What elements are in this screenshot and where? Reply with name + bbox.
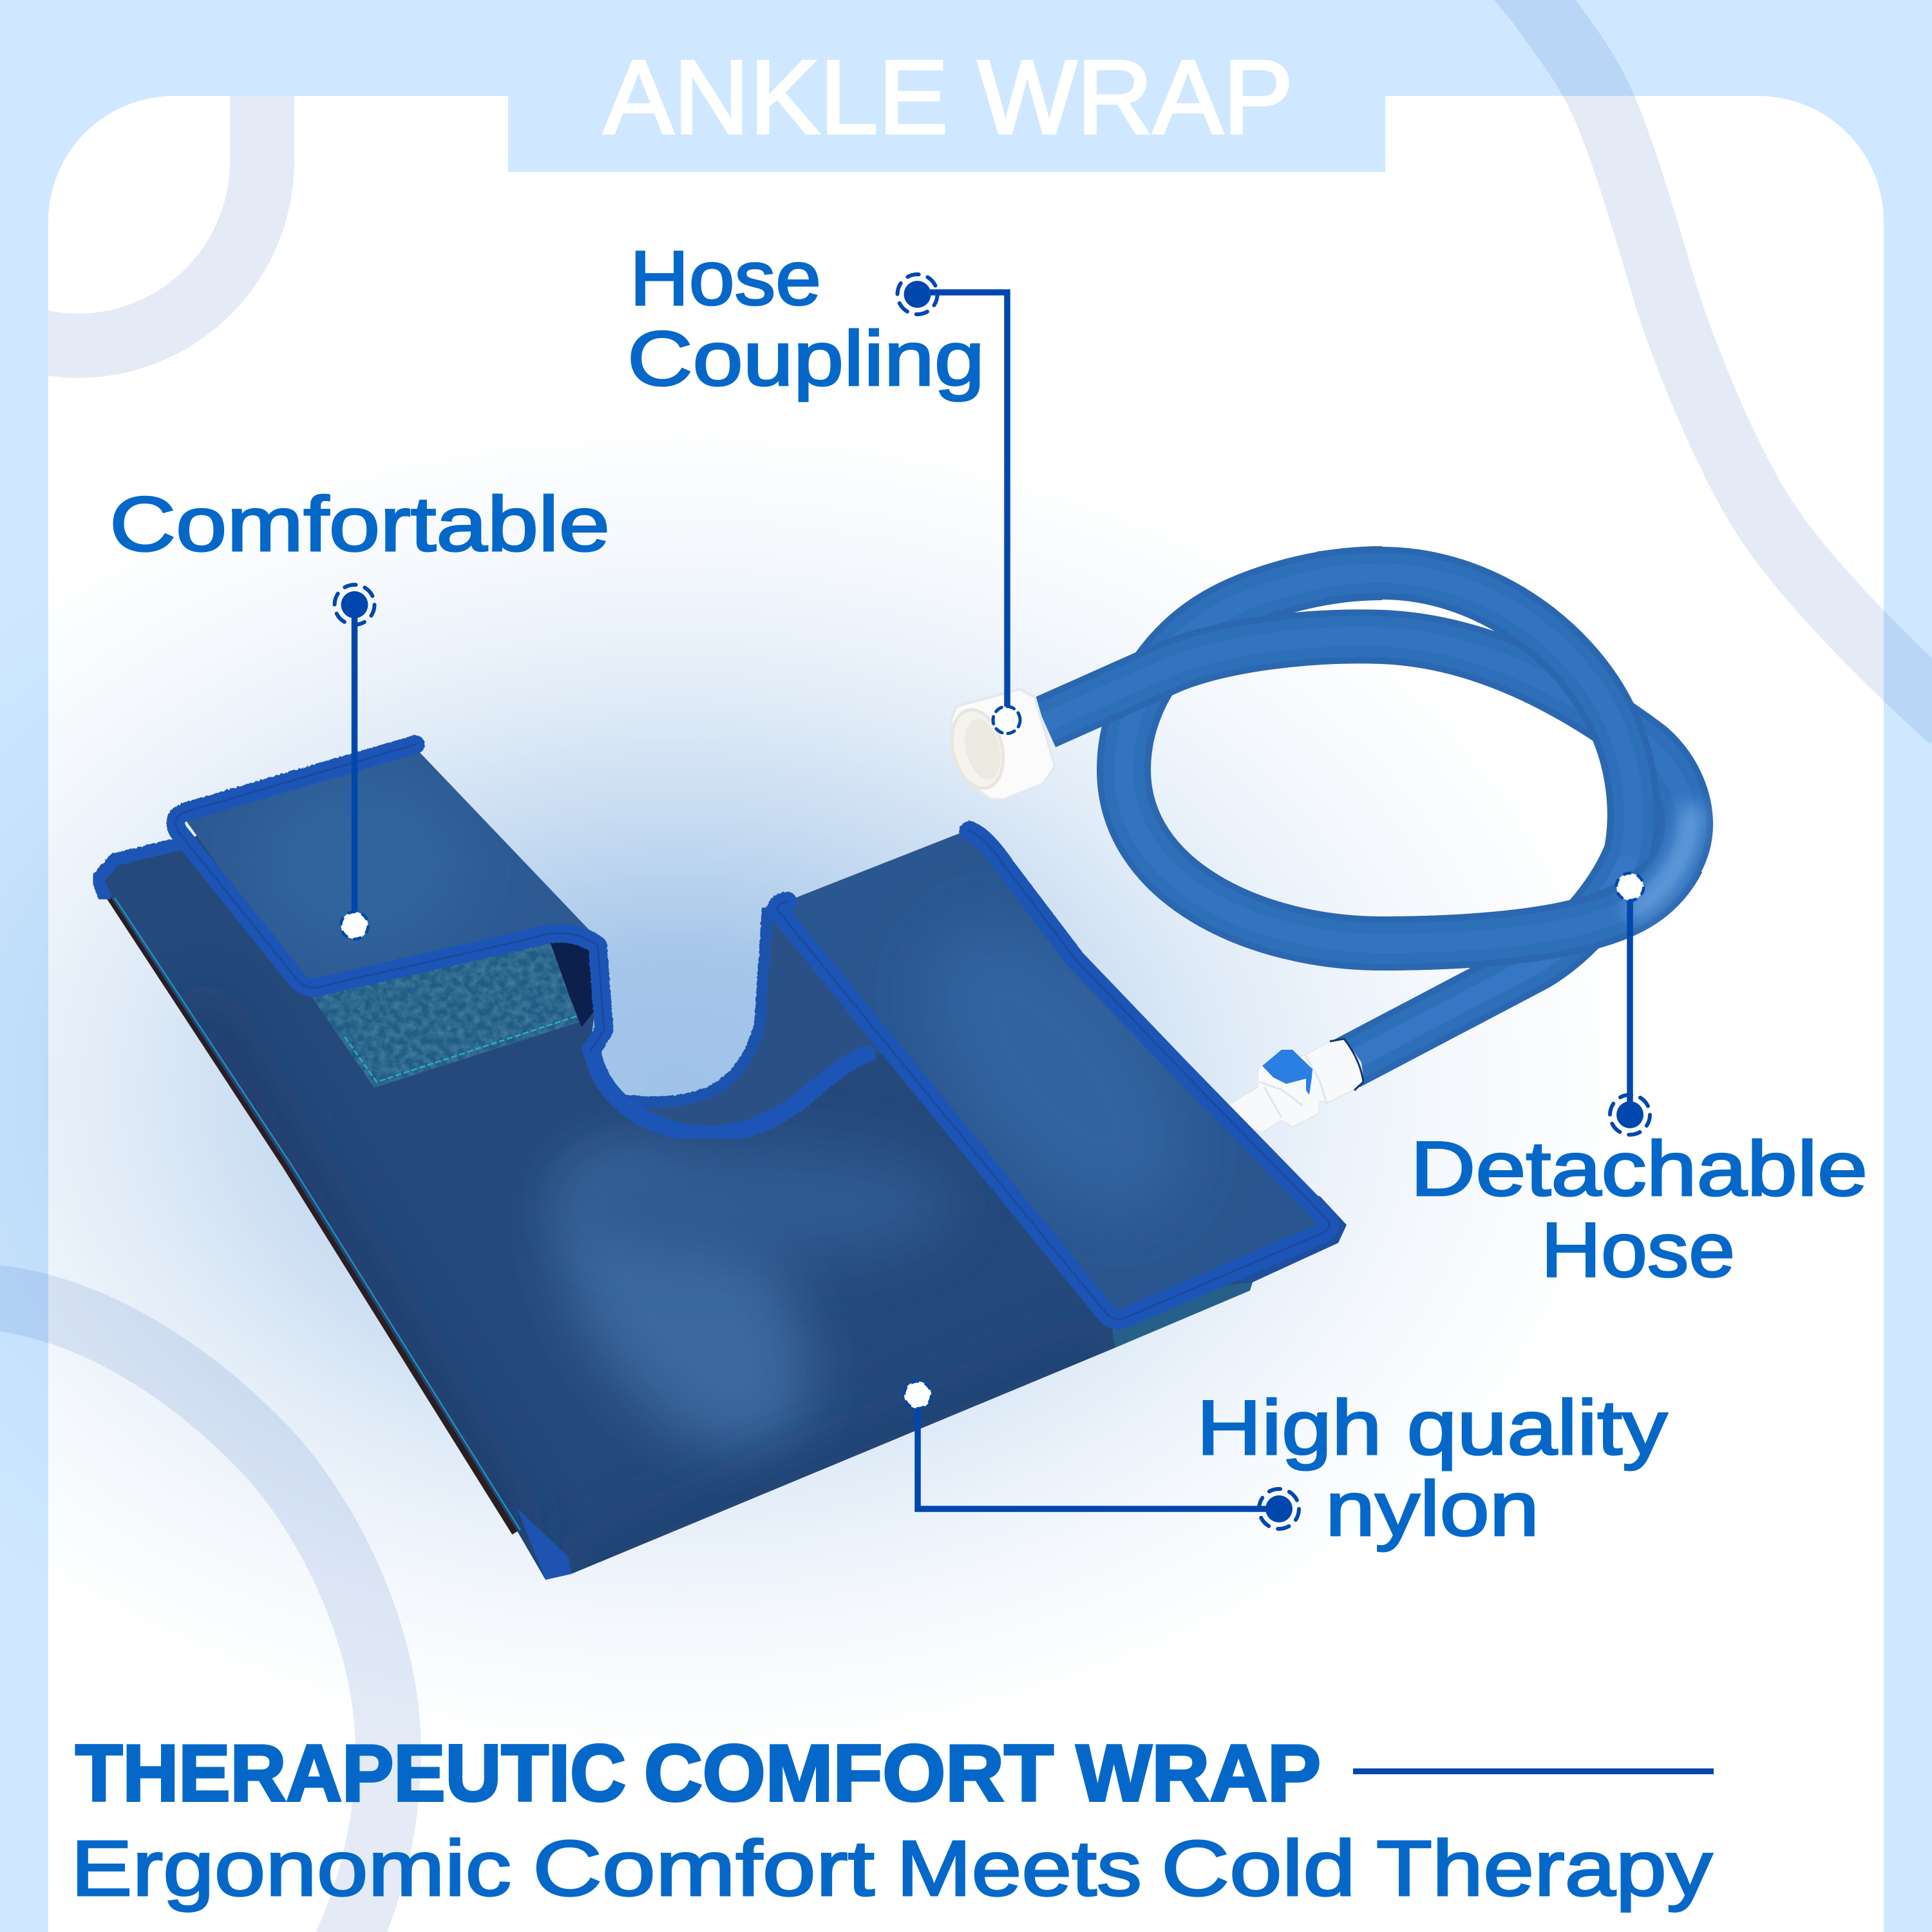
bottom heading: COMFORT bbox=[644, 1729, 1054, 1818]
callout line: High quality nylon bbox=[904, 1381, 1299, 1529]
soft radial glow behind product bbox=[0, 386, 1932, 1932]
right flap fleece bbox=[777, 831, 1329, 1319]
callout line: Hose Coupling bbox=[898, 274, 1020, 734]
heading: Ankle Wrap: ANKLE WRAP bbox=[603, 38, 1293, 156]
coupling thread opening bbox=[944, 705, 1011, 793]
coupling nut bbox=[951, 689, 1055, 800]
flap interior shadow bbox=[545, 927, 609, 1027]
connector shading bbox=[1259, 1055, 1327, 1117]
wrap body panel bbox=[99, 747, 1347, 1580]
label: Hose Coupling bbox=[627, 235, 985, 402]
back edge stitching bbox=[115, 898, 520, 1530]
label: Hose Coupling: Coupling bbox=[627, 316, 985, 402]
right flap shading bbox=[939, 936, 1173, 1202]
connector hose seam bbox=[1330, 1039, 1363, 1090]
hose bottom strand overlap bbox=[1382, 860, 1678, 943]
hose left loop bbox=[1124, 573, 1382, 943]
body fleece corner bbox=[98, 841, 191, 896]
body fleece right corner bbox=[1224, 1197, 1347, 1282]
connector blue button bbox=[1262, 1050, 1312, 1095]
bottom subheading: Ergonomic bbox=[71, 1824, 511, 1912]
bottom subheading bbox=[71, 1824, 1712, 1912]
label: Detachable Hose: Detachable bbox=[1410, 1126, 1868, 1212]
title band bbox=[508, 0, 1385, 172]
detachable start marker bbox=[1616, 873, 1643, 900]
bottom heading bbox=[75, 1729, 1321, 1818]
velcro tab under right flap bbox=[1112, 1282, 1253, 1348]
velcro strip bbox=[311, 927, 580, 1088]
wrap interior liner bbox=[618, 905, 914, 1140]
comfortable end marker bbox=[341, 912, 368, 939]
top-left decorative arc bbox=[13, 96, 262, 346]
right flap face bbox=[776, 829, 1328, 1315]
hose highlight bbox=[1629, 805, 1692, 914]
bottom subheading: Therapy bbox=[1376, 1824, 1712, 1912]
left flap shading bbox=[287, 806, 434, 920]
bottom heading: THERAPEUTIC bbox=[75, 1729, 626, 1818]
label: Detachable Hose bbox=[1410, 1126, 1868, 1293]
product: ankle wrap bbox=[98, 744, 1347, 1580]
body sheen bbox=[193, 1005, 1114, 1578]
bottom heading: WRAP bbox=[1076, 1729, 1321, 1818]
hose coupling top marker bbox=[898, 274, 938, 314]
hose top loop bbox=[1321, 573, 1634, 857]
callout line: Comfortable bbox=[335, 585, 375, 939]
bottom subheading: Meets bbox=[896, 1824, 1142, 1912]
velcro back edge bbox=[109, 896, 515, 1533]
right decorative swoosh bbox=[1515, 0, 1932, 720]
heading rule bbox=[1353, 1768, 1714, 1774]
liner fleece edge bbox=[618, 908, 768, 1102]
nylon start marker bbox=[904, 1381, 931, 1408]
nylon end marker bbox=[1259, 1489, 1299, 1529]
detachable end marker bbox=[1610, 1095, 1650, 1135]
bottom-left decorative arc bbox=[0, 1294, 388, 1932]
label: Detachable Hose: Hose bbox=[1541, 1207, 1735, 1293]
label: High quality nylon: nylon bbox=[1325, 1466, 1539, 1552]
comfortable top marker bbox=[335, 585, 375, 625]
hose tail bbox=[1347, 786, 1638, 1063]
left flap fleece bbox=[176, 744, 604, 1050]
connector housing bbox=[1224, 1039, 1363, 1132]
hose front strand bbox=[1045, 636, 1686, 943]
label: Hose Coupling: Hose bbox=[630, 235, 821, 321]
bottom subheading: Comfort bbox=[533, 1824, 875, 1912]
label: High quality nylon bbox=[1197, 1385, 1667, 1552]
velcro stitching bbox=[345, 1016, 576, 1082]
product: quick-release connector bbox=[1224, 1039, 1363, 1132]
product: hose bbox=[1045, 573, 1692, 1063]
callout line: Detachable Hose bbox=[1610, 873, 1650, 1135]
hose coupling end marker bbox=[993, 706, 1020, 734]
notch fleece edge bbox=[592, 1051, 875, 1134]
label: High quality nylon: High quality bbox=[1197, 1385, 1667, 1471]
left flap face bbox=[180, 744, 602, 985]
product: hose coupling bbox=[944, 689, 1055, 800]
bottom corner fleece bbox=[517, 1508, 571, 1580]
bottom subheading: Cold bbox=[1161, 1824, 1356, 1912]
label: Comfortable: Comfortable bbox=[109, 481, 610, 567]
